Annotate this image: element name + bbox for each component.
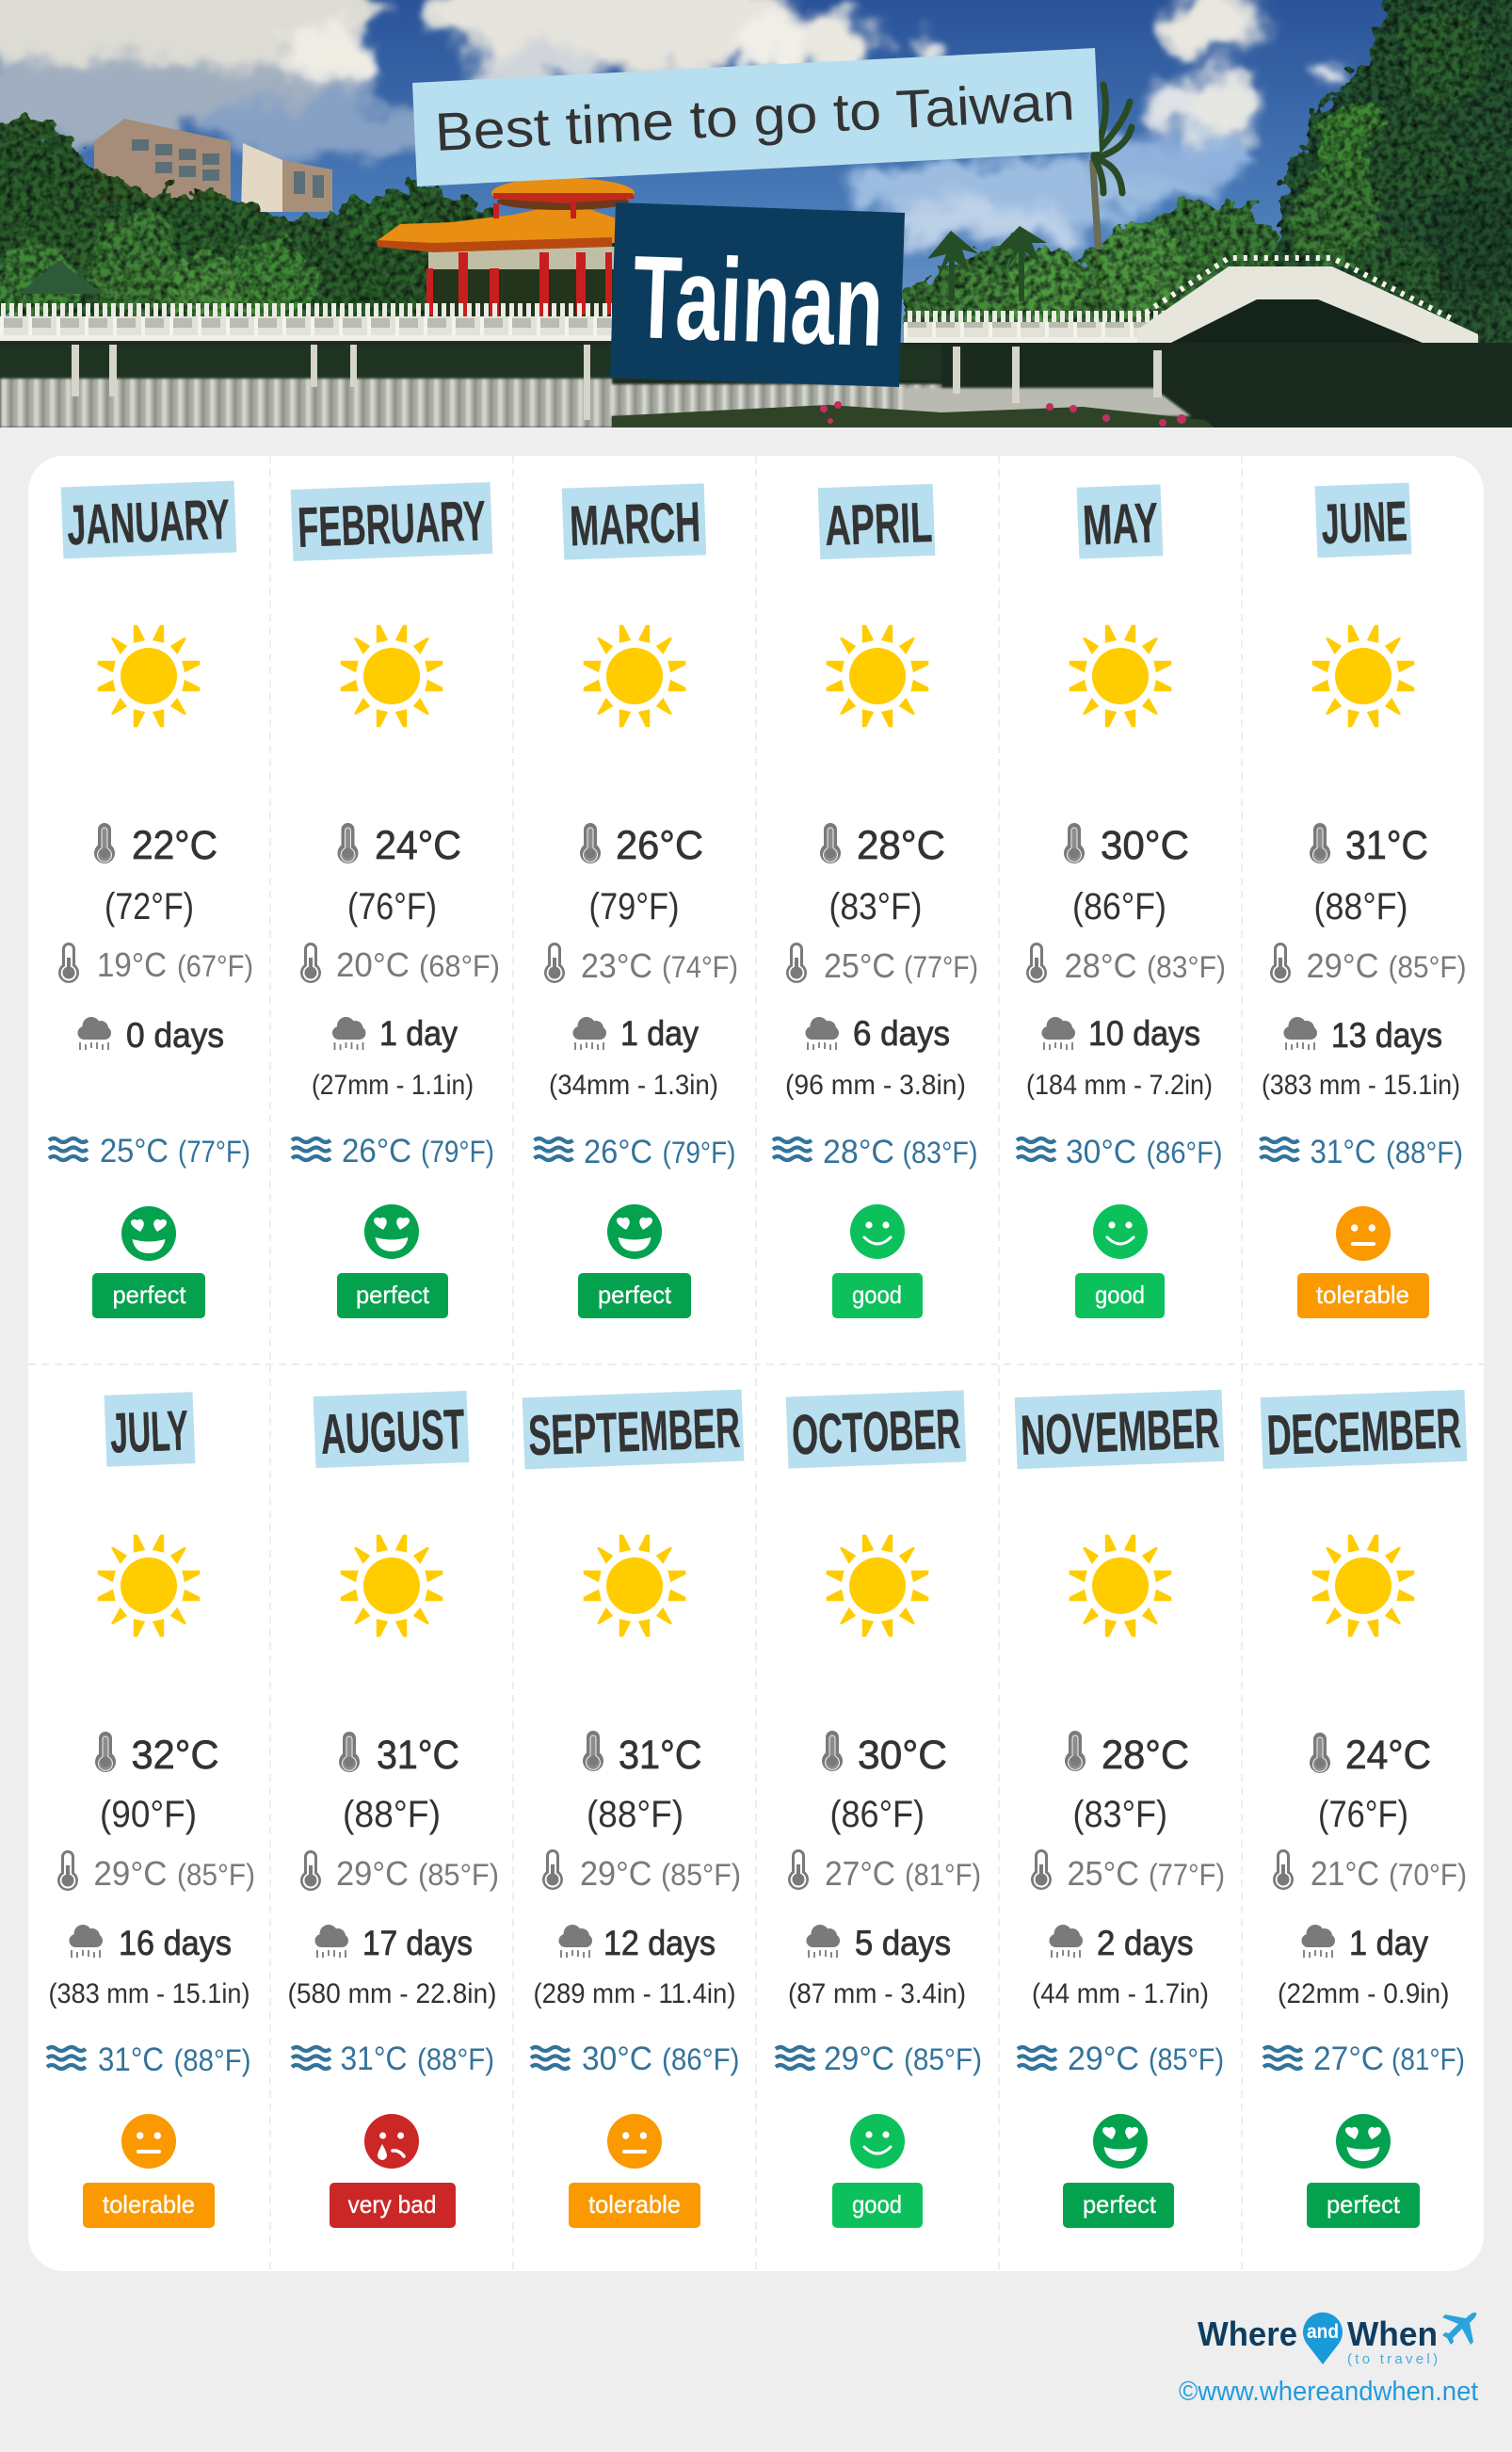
high temperature: 22°C bbox=[132, 823, 217, 868]
sea temperature F: (79°F) bbox=[663, 1136, 736, 1170]
high temperature F: (86°F) bbox=[1072, 886, 1166, 928]
sea temperature: 30°C bbox=[1066, 1134, 1136, 1170]
January heading bbox=[61, 480, 236, 559]
icon: thermometer high bbox=[1065, 1731, 1086, 1771]
rating badge bbox=[569, 2183, 700, 2228]
month: December bbox=[1261, 1390, 1467, 2228]
icon: thermometer low bbox=[542, 1849, 563, 1890]
high temperature F: (88°F) bbox=[1314, 886, 1408, 928]
low temperature: 29°C bbox=[1307, 946, 1378, 985]
low temperature: 29°C bbox=[94, 1854, 168, 1893]
March heading bbox=[562, 483, 706, 560]
icon: waves bbox=[1017, 1138, 1055, 1160]
September heading: SEPTEMBER bbox=[527, 1396, 741, 1467]
July heading: JULY bbox=[109, 1398, 189, 1465]
small palms bbox=[927, 226, 1047, 301]
icon: sun bbox=[98, 1535, 200, 1637]
low temperature: 25°C bbox=[824, 946, 895, 985]
month: November bbox=[1015, 1390, 1225, 2228]
high temperature F: (76°F) bbox=[347, 886, 437, 928]
main white panel bbox=[28, 456, 1484, 2271]
icon: rain cloud bbox=[1284, 1017, 1317, 1050]
rating badge bbox=[330, 2183, 456, 2228]
high temperature F: (79°F) bbox=[589, 886, 680, 928]
rating badge: good bbox=[852, 2190, 902, 2218]
rain days: 17 days bbox=[362, 1924, 473, 1962]
icon: tolerable face bbox=[607, 2114, 662, 2169]
logo word: When: When bbox=[1347, 2315, 1438, 2353]
pavilion bbox=[377, 178, 635, 317]
sea temperature F: (77°F) bbox=[178, 1135, 250, 1169]
icon: sun bbox=[827, 625, 928, 727]
icon: rain cloud bbox=[1049, 1925, 1083, 1958]
icon: perfect face bbox=[1093, 2114, 1148, 2169]
pagoda at left bbox=[19, 261, 104, 294]
sea temperature: 31°C bbox=[98, 2041, 164, 2078]
sea temperature F: (81°F) bbox=[1391, 2042, 1465, 2076]
icon: waves bbox=[292, 1138, 330, 1160]
icon: perfect face bbox=[607, 1204, 662, 1259]
sea temperature F: (83°F) bbox=[902, 1136, 977, 1170]
icon: sun bbox=[1312, 1535, 1414, 1637]
rating badge bbox=[578, 1273, 691, 1318]
May heading: MAY bbox=[1082, 491, 1159, 557]
sea temperature F: (86°F) bbox=[662, 2042, 740, 2076]
month: September bbox=[523, 1390, 744, 2228]
high temperature F: (72°F) bbox=[105, 886, 194, 928]
June heading: JUNE bbox=[1320, 490, 1408, 556]
high temperature F: (86°F) bbox=[830, 1794, 925, 1835]
rating badge bbox=[1307, 2183, 1420, 2228]
icon: plane bbox=[1442, 2313, 1476, 2345]
month: August bbox=[288, 1391, 499, 2228]
icon: rain cloud bbox=[559, 1925, 592, 1958]
rainfall: (27mm - 1.1in) bbox=[312, 1070, 474, 1101]
low temperature: 28°C bbox=[1064, 946, 1137, 985]
high temperature: 31°C bbox=[1345, 823, 1428, 868]
icon: waves bbox=[1263, 2047, 1302, 2069]
palm bbox=[1089, 160, 1102, 322]
rainfall: (87 mm - 3.4in) bbox=[788, 1978, 966, 2009]
sea temperature F: (88°F) bbox=[1386, 1136, 1463, 1170]
high temperature: 24°C bbox=[375, 823, 461, 868]
icon: rain cloud bbox=[70, 1925, 103, 1958]
month: March bbox=[535, 483, 738, 1318]
city name: Tainan bbox=[631, 232, 886, 371]
rating badge bbox=[832, 1273, 923, 1318]
city name box bbox=[610, 202, 905, 387]
icon: thermometer low bbox=[544, 943, 565, 983]
rainfall: (580 mm - 22.8in) bbox=[288, 1978, 497, 2009]
rating badge: tolerable bbox=[588, 2190, 681, 2218]
low temperature: 21°C bbox=[1311, 1854, 1379, 1893]
low temperature: 29°C bbox=[336, 1854, 409, 1893]
icon: sun bbox=[98, 625, 200, 727]
rating badge bbox=[337, 1273, 448, 1318]
high temperature: 24°C bbox=[1345, 1733, 1431, 1778]
icon: sun bbox=[341, 625, 442, 727]
icon: thermometer high bbox=[583, 1731, 603, 1771]
low temperature: 29°C bbox=[580, 1854, 651, 1893]
icon: thermometer high bbox=[94, 823, 115, 863]
sea temperature: 27°C bbox=[1313, 2041, 1384, 2077]
low temperature F: (70°F) bbox=[1389, 1858, 1467, 1892]
rainfall: (383 mm - 15.1in) bbox=[49, 1978, 250, 2009]
low temperature F: (68°F) bbox=[419, 949, 500, 983]
icon: perfect face bbox=[121, 1206, 176, 1261]
sea temperature F: (88°F) bbox=[173, 2043, 250, 2077]
icon: thermometer low bbox=[788, 1849, 809, 1890]
sea temperature F: (88°F) bbox=[417, 2042, 494, 2076]
high temperature: 30°C bbox=[1101, 823, 1189, 868]
icon: thermometer low bbox=[1026, 943, 1047, 983]
icon: waves bbox=[49, 1138, 88, 1160]
February heading: FEBRUARY bbox=[297, 489, 487, 559]
icon: thermometer low bbox=[1270, 943, 1291, 983]
rating badge bbox=[1063, 2183, 1174, 2228]
sea temperature: 25°C bbox=[100, 1133, 169, 1170]
icon: thermometer high bbox=[1310, 1733, 1330, 1773]
icon: waves bbox=[773, 1138, 812, 1160]
website credit: ©www.whereandwhen.net bbox=[1179, 2377, 1478, 2407]
sea temperature: 29°C bbox=[1068, 2041, 1139, 2077]
icon: sun bbox=[584, 625, 685, 727]
icon: waves bbox=[535, 1138, 572, 1160]
water bbox=[0, 343, 1512, 427]
icon: thermometer high bbox=[95, 1732, 116, 1772]
hero photo: pond, pavilion and bridge in Tainan bbox=[0, 0, 1512, 427]
icon: thermometer high bbox=[337, 823, 358, 863]
logo word: and: and bbox=[1307, 2321, 1339, 2343]
low temperature: 25°C bbox=[1068, 1854, 1139, 1893]
rainfall: (34mm - 1.3in) bbox=[549, 1070, 718, 1101]
sea temperature: 29°C bbox=[824, 2041, 894, 2077]
low temperature: 23°C bbox=[581, 946, 652, 985]
March heading: MARCH bbox=[569, 491, 701, 557]
sea temperature F: (86°F) bbox=[1147, 1136, 1222, 1170]
icon: thermometer low bbox=[300, 943, 321, 983]
high temperature: 28°C bbox=[857, 823, 945, 868]
icon: thermometer low bbox=[58, 943, 79, 983]
icon: thermometer high bbox=[1064, 823, 1085, 863]
rating badge: good bbox=[852, 1281, 902, 1309]
trees bbox=[0, 0, 1512, 358]
logo tagline: (to travel) bbox=[1347, 2351, 1438, 2367]
sea temperature F: (79°F) bbox=[421, 1135, 494, 1169]
rating badge: good bbox=[1095, 1281, 1145, 1309]
rating badge: perfect bbox=[356, 1281, 430, 1309]
rainfall: (44 mm - 1.7in) bbox=[1032, 1978, 1209, 2009]
July heading bbox=[105, 1392, 195, 1467]
icon: thermometer high bbox=[820, 823, 841, 863]
icon: waves bbox=[1260, 1138, 1299, 1160]
icon: perfect face bbox=[364, 1204, 419, 1259]
icon: thermometer low bbox=[1273, 1849, 1294, 1890]
icon: sun bbox=[584, 1535, 685, 1637]
icon: good face bbox=[850, 1204, 905, 1259]
logo word: Where: Where bbox=[1198, 2315, 1297, 2353]
sea temperature: 28°C bbox=[823, 1134, 894, 1170]
low temperature F: (85°F) bbox=[661, 1858, 741, 1892]
icon: rain cloud bbox=[77, 1017, 111, 1050]
icon: sun bbox=[827, 1535, 928, 1637]
icon: thermometer low bbox=[57, 1850, 78, 1891]
rating badge bbox=[1297, 1273, 1429, 1318]
month: January bbox=[49, 480, 253, 1318]
October heading bbox=[786, 1390, 966, 1469]
icon: rain cloud bbox=[806, 1925, 840, 1958]
high temperature F: (76°F) bbox=[1318, 1794, 1408, 1835]
rating badge: perfect bbox=[598, 1281, 672, 1309]
icon: thermometer low bbox=[1031, 1849, 1052, 1890]
rating badge bbox=[832, 2183, 923, 2228]
icon: rain cloud bbox=[332, 1017, 365, 1050]
rain days: 16 days bbox=[119, 1924, 232, 1962]
rating badge bbox=[83, 2183, 215, 2228]
month: May bbox=[1017, 484, 1226, 1318]
sea temperature: 31°C bbox=[1311, 1134, 1376, 1170]
month: April bbox=[773, 484, 978, 1318]
April heading bbox=[818, 484, 935, 559]
low temperature F: (85°F) bbox=[1388, 950, 1467, 984]
high temperature F: (88°F) bbox=[343, 1794, 441, 1835]
rainfall: (22mm - 0.9in) bbox=[1278, 1978, 1450, 2009]
November heading bbox=[1015, 1390, 1224, 1469]
rating badge bbox=[1075, 1273, 1165, 1318]
high temperature: 31°C bbox=[377, 1733, 459, 1778]
low temperature F: (74°F) bbox=[662, 950, 738, 984]
icon: sun bbox=[341, 1535, 442, 1637]
icon: sun bbox=[1070, 625, 1171, 727]
sea temperature F: (85°F) bbox=[1149, 2042, 1224, 2076]
rain days: 6 days bbox=[853, 1014, 950, 1053]
icon: thermometer high bbox=[580, 823, 601, 863]
high temperature F: (83°F) bbox=[828, 886, 923, 928]
rating badge: tolerable bbox=[1316, 1281, 1409, 1309]
high temperature: 31°C bbox=[619, 1733, 702, 1778]
sea temperature: 26°C bbox=[584, 1134, 652, 1170]
rating badge: perfect bbox=[1327, 2190, 1401, 2218]
low temperature F: (85°F) bbox=[418, 1858, 499, 1892]
icon: very bad face bbox=[364, 2114, 419, 2169]
icon: rain cloud bbox=[572, 1017, 606, 1050]
rain days: 1 day bbox=[1349, 1924, 1428, 1962]
buildings bbox=[94, 119, 231, 202]
rainfall: (383 mm - 15.1in) bbox=[1262, 1070, 1460, 1101]
icon: thermometer low bbox=[300, 1850, 321, 1891]
February heading bbox=[291, 482, 492, 561]
May heading bbox=[1077, 484, 1163, 559]
icon: thermometer high bbox=[339, 1732, 360, 1772]
icon: waves bbox=[47, 2047, 86, 2069]
April heading: APRIL bbox=[824, 491, 933, 557]
icon: thermometer high bbox=[1310, 823, 1330, 863]
low temperature F: (81°F) bbox=[905, 1858, 981, 1892]
sea temperature: 31°C bbox=[341, 2041, 407, 2077]
August heading: AUGUST bbox=[319, 1397, 466, 1466]
icon: tolerable face bbox=[121, 2114, 176, 2169]
title text: Best time to go to Taiwan bbox=[434, 72, 1076, 163]
logo: Where and When bbox=[1198, 2313, 1476, 2367]
month: June bbox=[1260, 483, 1467, 1318]
low temperature: 19°C bbox=[97, 945, 167, 984]
low temperature F: (67°F) bbox=[177, 949, 253, 983]
low temperature F: (85°F) bbox=[177, 1858, 255, 1892]
icon: rain cloud bbox=[1041, 1017, 1075, 1050]
month: October bbox=[776, 1390, 982, 2228]
rain days: 2 days bbox=[1097, 1924, 1194, 1962]
rain days: 5 days bbox=[855, 1924, 951, 1962]
icon: good face bbox=[850, 2114, 905, 2169]
rainfall: (96 mm - 3.8in) bbox=[785, 1070, 966, 1101]
rain days: 0 days bbox=[126, 1016, 224, 1055]
sea temperature: 30°C bbox=[582, 2041, 652, 2077]
rating badge: perfect bbox=[113, 1281, 186, 1309]
bridge bbox=[0, 255, 1478, 343]
rainfall: (289 mm - 11.4in) bbox=[533, 1978, 736, 2009]
high temperature: 26°C bbox=[616, 823, 703, 868]
September heading bbox=[523, 1390, 744, 1469]
rating badge: perfect bbox=[1083, 2190, 1157, 2218]
low temperature: 20°C bbox=[336, 945, 410, 984]
rain days: 10 days bbox=[1088, 1014, 1200, 1053]
icon: waves bbox=[1018, 2047, 1056, 2069]
month: February bbox=[291, 482, 500, 1318]
rain days: 1 day bbox=[379, 1014, 458, 1053]
high temperature: 28°C bbox=[1102, 1733, 1189, 1778]
icon: sun bbox=[1312, 625, 1414, 727]
low temperature F: (77°F) bbox=[1149, 1858, 1225, 1892]
icon: tolerable face bbox=[1336, 1206, 1391, 1261]
January heading: JANUARY bbox=[66, 488, 231, 557]
June heading bbox=[1315, 483, 1411, 557]
rain days: 12 days bbox=[603, 1924, 716, 1962]
icon: sun bbox=[1070, 1535, 1171, 1637]
rating badge bbox=[92, 1273, 205, 1318]
rating badge: very bad bbox=[348, 2190, 437, 2218]
icon: thermometer low bbox=[786, 943, 807, 983]
low temperature: 27°C bbox=[825, 1854, 895, 1893]
high temperature F: (90°F) bbox=[100, 1794, 197, 1835]
icon: rain cloud bbox=[1301, 1925, 1335, 1958]
low temperature F: (83°F) bbox=[1147, 950, 1226, 984]
sea temperature: 26°C bbox=[342, 1133, 411, 1170]
icon: perfect face bbox=[1336, 2114, 1391, 2169]
icon: map pin bbox=[1303, 2313, 1343, 2364]
icon: rain cloud bbox=[806, 1017, 839, 1050]
rainfall: (184 mm - 7.2in) bbox=[1026, 1070, 1213, 1101]
August heading bbox=[314, 1391, 469, 1468]
high temperature: 30°C bbox=[858, 1733, 947, 1778]
icon: thermometer high bbox=[822, 1731, 843, 1771]
high temperature F: (88°F) bbox=[587, 1794, 684, 1835]
icon: waves bbox=[292, 2047, 330, 2069]
icon: waves bbox=[531, 2047, 570, 2069]
sea temperature F: (85°F) bbox=[904, 2042, 982, 2076]
low temperature F: (77°F) bbox=[904, 950, 978, 984]
rain days: 1 day bbox=[620, 1014, 699, 1053]
icon: good face bbox=[1093, 1204, 1148, 1259]
icon: waves bbox=[776, 2047, 814, 2069]
rain days: 13 days bbox=[1331, 1016, 1442, 1055]
high temperature F: (83°F) bbox=[1073, 1794, 1167, 1835]
November heading: NOVEMBER bbox=[1020, 1396, 1220, 1467]
rating badge: tolerable bbox=[103, 2190, 195, 2218]
month: July bbox=[47, 1392, 255, 2228]
October heading: OCTOBER bbox=[791, 1397, 961, 1466]
high temperature: 32°C bbox=[132, 1733, 218, 1778]
title banner bbox=[412, 48, 1100, 186]
icon: rain cloud bbox=[314, 1925, 348, 1958]
